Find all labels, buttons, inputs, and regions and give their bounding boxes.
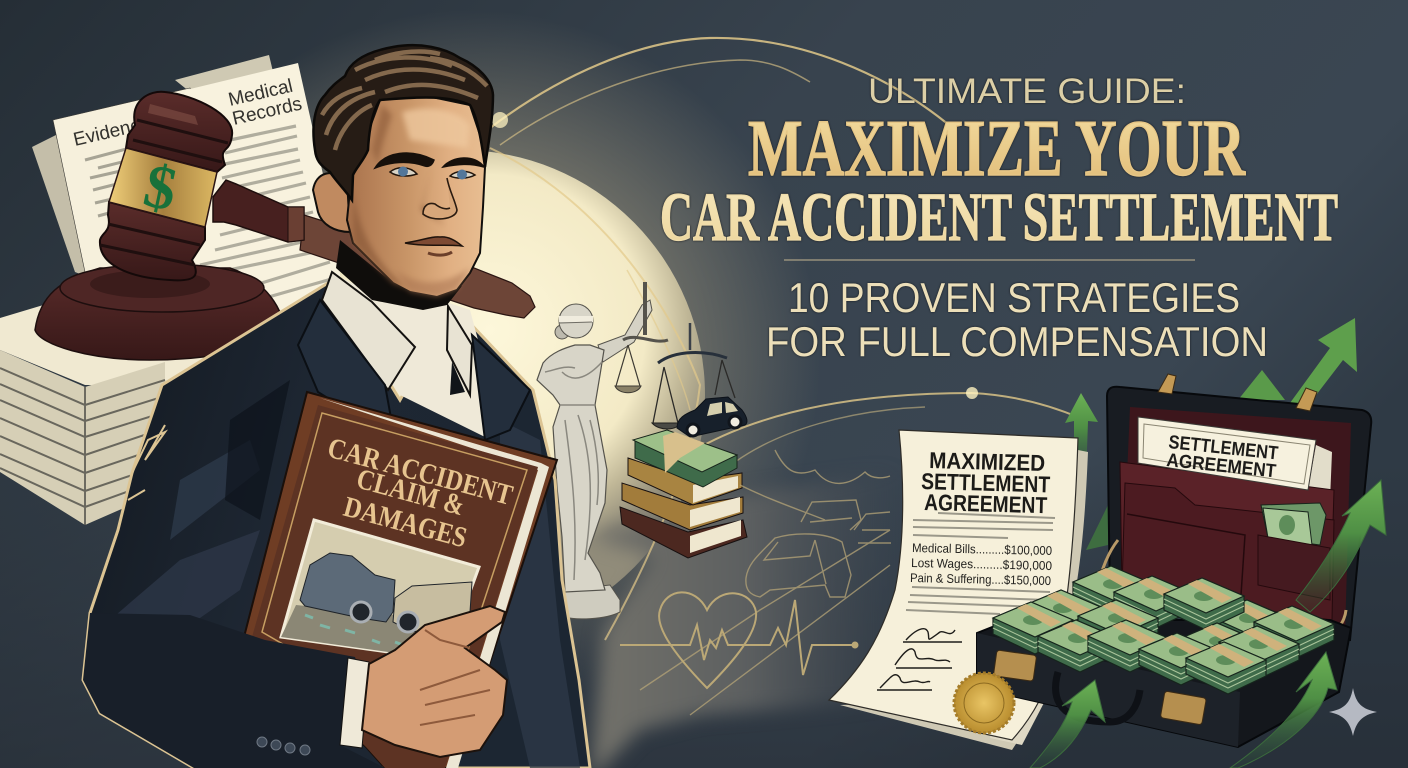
medical records sheet: Records (230, 93, 304, 130)
golden glow disc behind the lawyer (215, 150, 900, 768)
arrow: right upper (1296, 480, 1386, 612)
money bundles (993, 566, 1334, 694)
face (347, 96, 485, 297)
book front cover (252, 405, 538, 768)
book crash photo (281, 520, 479, 660)
settlement document (829, 430, 1088, 750)
money bundle on books (633, 430, 737, 487)
statue body (537, 345, 607, 592)
lawyer figure (83, 45, 590, 768)
line items (910, 541, 1052, 588)
gavel (35, 92, 535, 360)
black car icon (677, 397, 747, 437)
hair (313, 45, 493, 200)
small hand scale (615, 282, 668, 393)
sparkle icon (1329, 688, 1377, 736)
hand (362, 606, 507, 757)
spare sheets in lid (1308, 445, 1332, 500)
arrow: right lower (1230, 652, 1337, 768)
maroon lid pockets (1120, 462, 1334, 620)
title block (660, 72, 1338, 365)
evidence sheet: Evidence (71, 113, 152, 151)
crashed blue car (300, 553, 395, 622)
briefcase lid (1107, 387, 1371, 640)
under-jaw shadow (336, 240, 462, 310)
briefcase hinges (1158, 374, 1317, 411)
line car: front (746, 534, 851, 597)
book (244, 392, 557, 768)
document heading (921, 447, 1051, 518)
gold seal (954, 673, 1014, 733)
hair highlights (322, 52, 487, 150)
title: ultimate guide: ULTIMATE GUIDE: (868, 72, 1186, 111)
ear (313, 173, 350, 232)
shirt cuff (340, 658, 369, 748)
arrow: left small (1065, 393, 1098, 480)
green arrows in front (1030, 480, 1386, 768)
subtitle line 1: 10 PROVEN STRATEGIES (788, 274, 1240, 321)
statue raised arm (598, 300, 652, 362)
medical records sheet: Medical (226, 76, 295, 111)
arrow: top small peak (1238, 370, 1285, 400)
arrow: lower left stub (1086, 505, 1108, 550)
book: bottom (620, 507, 747, 558)
shirt (330, 273, 490, 437)
title divider (784, 259, 1195, 261)
face shading (353, 190, 410, 290)
line items: Medical Bills.........$100,000 (912, 541, 1052, 558)
line car: back (854, 512, 891, 543)
book title (324, 432, 516, 554)
subtitle line 2: FOR FULL COMPENSATION (766, 318, 1268, 365)
document heading: SETTLEMENT (921, 468, 1051, 497)
arrow: top large (1290, 318, 1357, 403)
book title: CLAIM & (353, 463, 468, 522)
sleeve (83, 613, 385, 768)
front locks (993, 650, 1206, 725)
line art: road and cars (640, 450, 891, 715)
crashed beige car (393, 582, 472, 632)
settlement agreement in lid (1138, 417, 1316, 490)
heart and ECG line (620, 592, 858, 688)
settlement agreement in lid: AGREEMENT (1165, 450, 1277, 483)
statue base (565, 585, 620, 619)
paper sheet (829, 430, 1078, 740)
gold band (109, 148, 217, 227)
line items: Lost Wages.........$190,000 (911, 556, 1052, 573)
line car: middle (801, 500, 861, 530)
case handle (1056, 672, 1140, 722)
book title: DAMAGES (340, 491, 470, 554)
nose (423, 178, 457, 219)
mouth (405, 237, 462, 246)
floor shading under the books (590, 470, 900, 768)
stack of documents (0, 240, 340, 525)
green arrows behind the briefcase (1065, 318, 1357, 550)
statue head (555, 304, 593, 339)
scales with car icon (652, 323, 747, 437)
book title: CAR ACCIDENT (324, 432, 516, 512)
document heading: MAXIMIZED (929, 447, 1046, 476)
medical records sheet (160, 63, 340, 340)
statue of justice (537, 282, 668, 619)
settlement agreement in lid: SETTLEMENT (1167, 432, 1279, 465)
document heading: AGREEMENT (924, 489, 1048, 518)
cash in pocket (1258, 503, 1330, 600)
arrow: bottom left (1030, 680, 1105, 768)
suit folds (110, 380, 580, 768)
eyes (390, 166, 475, 180)
book: middle (622, 483, 743, 530)
golden arcs (490, 38, 1080, 640)
eyebrows (375, 153, 484, 168)
signatures (877, 629, 962, 690)
nose shade (421, 165, 445, 225)
evidence sheet (53, 88, 240, 290)
jacket buttons (257, 737, 310, 755)
dollar sign: $ (138, 152, 183, 225)
stacked books and money (620, 430, 747, 558)
gavel handle (213, 180, 535, 318)
suit jacket (83, 283, 590, 768)
book gold frame (262, 413, 527, 735)
line items: Pain & Suffering....$150,000 (910, 571, 1051, 588)
briefcase base (977, 620, 1351, 747)
book: top (628, 458, 742, 505)
gavel head (100, 92, 232, 280)
book pages (320, 398, 549, 768)
gavel sound block (35, 264, 285, 360)
collar and lapels (298, 272, 530, 440)
briefcase (977, 374, 1371, 747)
briefcase straps (1098, 540, 1346, 630)
papers: evidence and medical records (32, 55, 340, 340)
